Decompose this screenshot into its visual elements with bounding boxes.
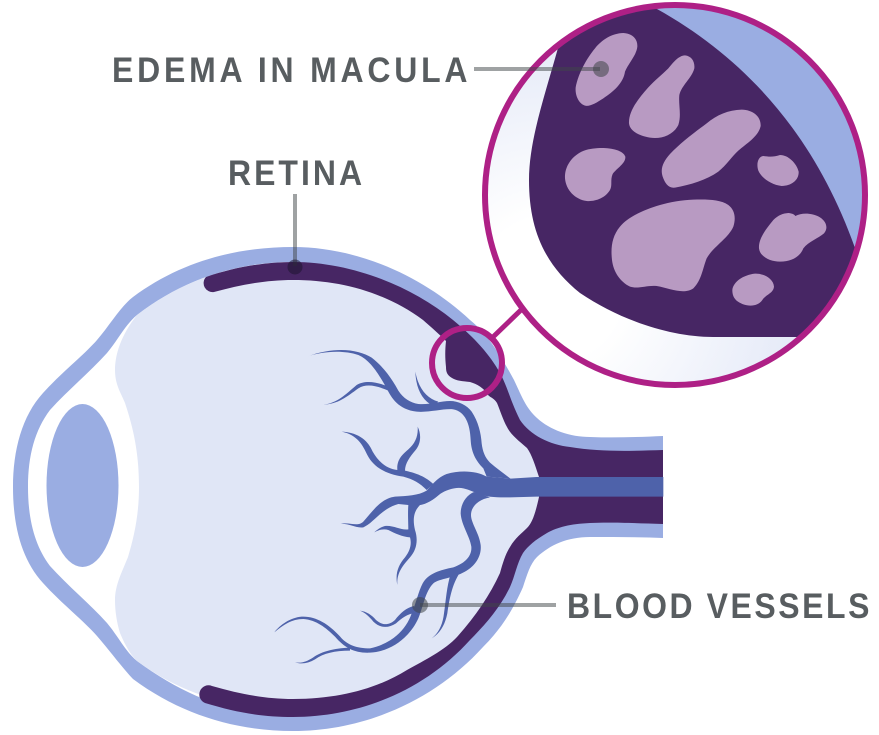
central vessel trunk <box>420 471 663 505</box>
edema patch 5 <box>757 155 799 186</box>
blood vessels <box>274 350 663 663</box>
magnifier background <box>485 5 865 385</box>
label: blood vessels <box>412 586 869 626</box>
blood vessels leader line <box>420 603 556 607</box>
retina leader line <box>293 194 297 266</box>
clipped magnified tissue <box>529 8 862 337</box>
retina and optic nerve sheath <box>199 262 663 717</box>
vitreous body <box>115 262 545 709</box>
blood vessels leader dot <box>412 597 428 613</box>
blue outer wall <box>657 8 862 247</box>
lower vessel branch <box>274 492 490 653</box>
small magnifier ring <box>432 328 502 398</box>
edema patches <box>565 33 826 306</box>
lower-left vessel branch <box>340 491 440 585</box>
edema patch 8 <box>732 274 774 306</box>
lower side twig three <box>360 606 417 627</box>
edema patch 4 <box>565 148 625 201</box>
edema leader dot <box>593 61 609 77</box>
eye cross-section <box>13 247 663 731</box>
blood vessels label text: BLOOD VESSELS <box>567 586 869 626</box>
magnified macula <box>485 0 879 385</box>
edema patch 6 <box>612 200 735 291</box>
edema patch 2 <box>629 55 694 138</box>
middle-left vessel branch <box>342 427 433 490</box>
retina label text: RETINA <box>228 153 362 193</box>
lens <box>46 404 118 567</box>
upper vessel branch <box>307 350 511 479</box>
edema patch 3 <box>662 110 761 188</box>
edema label text: EDEMA IN MACULA <box>112 50 468 90</box>
magnifier connector <box>493 309 522 337</box>
lower side twig one <box>295 648 350 663</box>
label: retina <box>228 153 362 274</box>
edema patch 1 <box>576 33 637 106</box>
upper side twig two <box>415 372 438 406</box>
sclera outer wall <box>13 247 663 731</box>
edema leader line <box>474 67 600 71</box>
retina leader dot <box>288 260 302 274</box>
lower side twig two <box>432 572 460 638</box>
magnifier ring <box>485 5 865 385</box>
upper side twig one <box>323 382 388 405</box>
edema patch 7 <box>759 213 826 262</box>
label: edema in macula <box>112 50 609 90</box>
anterior chamber <box>28 262 293 716</box>
purple retina layer <box>529 9 854 337</box>
